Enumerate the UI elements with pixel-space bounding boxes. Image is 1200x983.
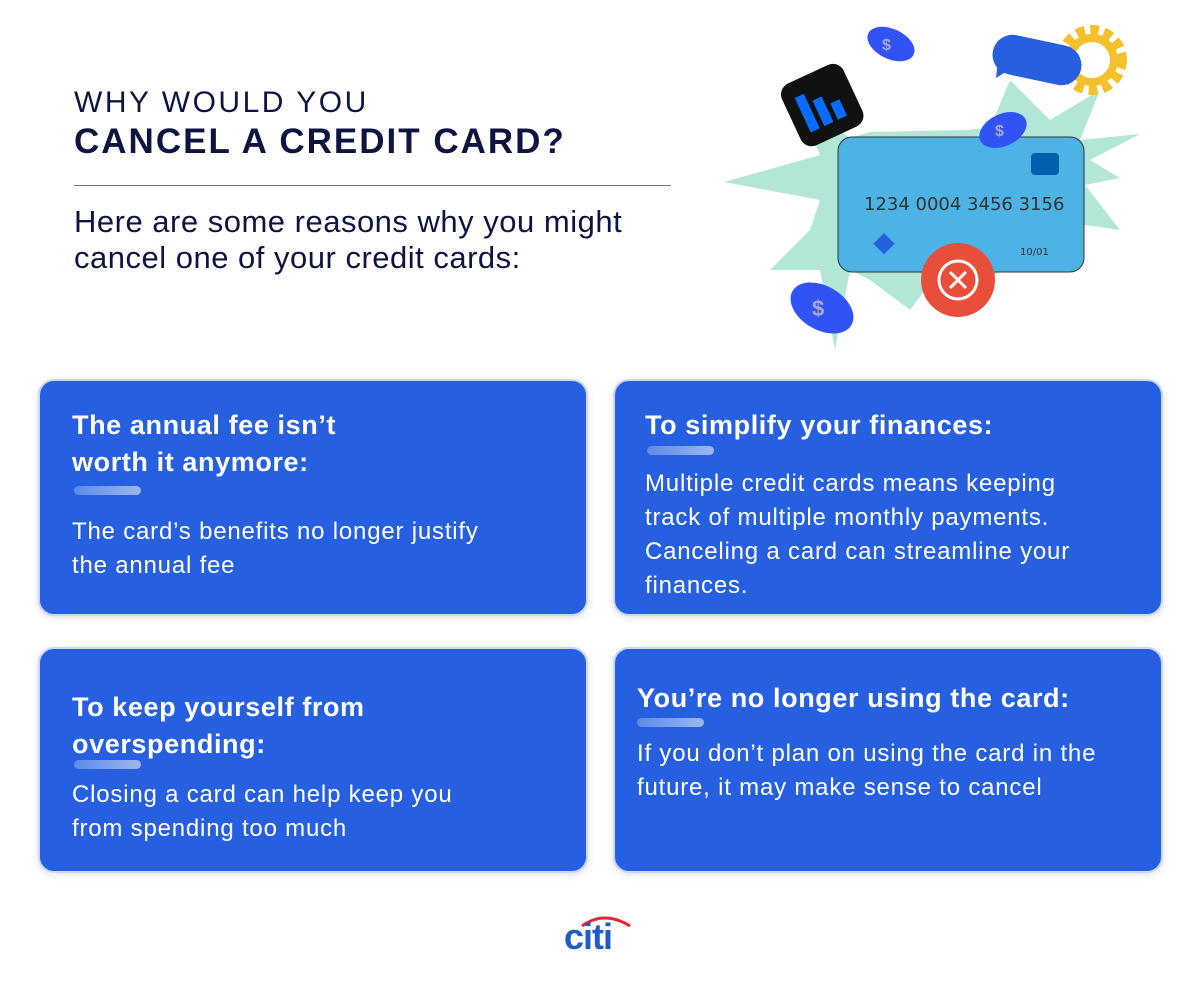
icon: coins (782, 20, 1032, 344)
panel: overspending: To keep yourself from (72, 692, 365, 722)
panel: simplify: track of multiple monthly payments. (645, 504, 1049, 531)
subtitle (74, 204, 622, 275)
panel: no longer using: If you don’t plan on using the card in the (637, 740, 1096, 767)
icon: chat bubble (989, 31, 1085, 89)
panel: annual fee: the annual fee (72, 552, 235, 579)
panel: no longer using (613, 647, 1163, 873)
subtitle: Here are some reasons why you might (74, 204, 622, 239)
panel: overspending (38, 647, 588, 873)
panel: annual fee: worth it anymore: (72, 447, 309, 477)
panel: annual fee (38, 379, 588, 616)
panel: overspending: overspending: (72, 729, 266, 759)
icon: coins: $ (882, 37, 891, 54)
icon: coins: $ (995, 123, 1004, 140)
credit card: 1234 0004 3456 3156 (864, 194, 1064, 215)
credit card (838, 137, 1084, 272)
panel: simplify: finances. (645, 572, 748, 599)
icon: coins: $ (812, 296, 824, 321)
panel: annual fee: The card’s benefits no longer justify (72, 518, 479, 545)
panel: overspending: Closing a card can help keep you (72, 781, 452, 808)
panel: annual fee: The annual fee isn’t (72, 410, 336, 440)
icon: chart app (777, 60, 867, 150)
icon: cancel (921, 243, 995, 317)
subtitle: cancel one of your credit cards: (74, 240, 521, 275)
logo: citi: citi (564, 916, 612, 957)
credit card: 10/01 (1020, 247, 1049, 258)
title: WHY WOULD YOU (74, 86, 369, 119)
title: CANCEL A CREDIT CARD? (74, 122, 566, 161)
panel: simplify: Canceling a card can streamline your (645, 538, 1070, 565)
illustration: cancelled credit card (724, 25, 1140, 350)
panel: no longer using: future, it may make sense to cancel (637, 774, 1043, 801)
panel: simplify: To simplify your finances: (645, 410, 993, 440)
panel: no longer using: You’re no longer using the card: (637, 683, 1070, 713)
icon: gear (1064, 32, 1120, 88)
panel: simplify (613, 379, 1163, 616)
panel: overspending: from spending too much (72, 815, 347, 842)
panel: simplify: Multiple credit cards means keeping (645, 470, 1056, 497)
title (74, 86, 566, 161)
